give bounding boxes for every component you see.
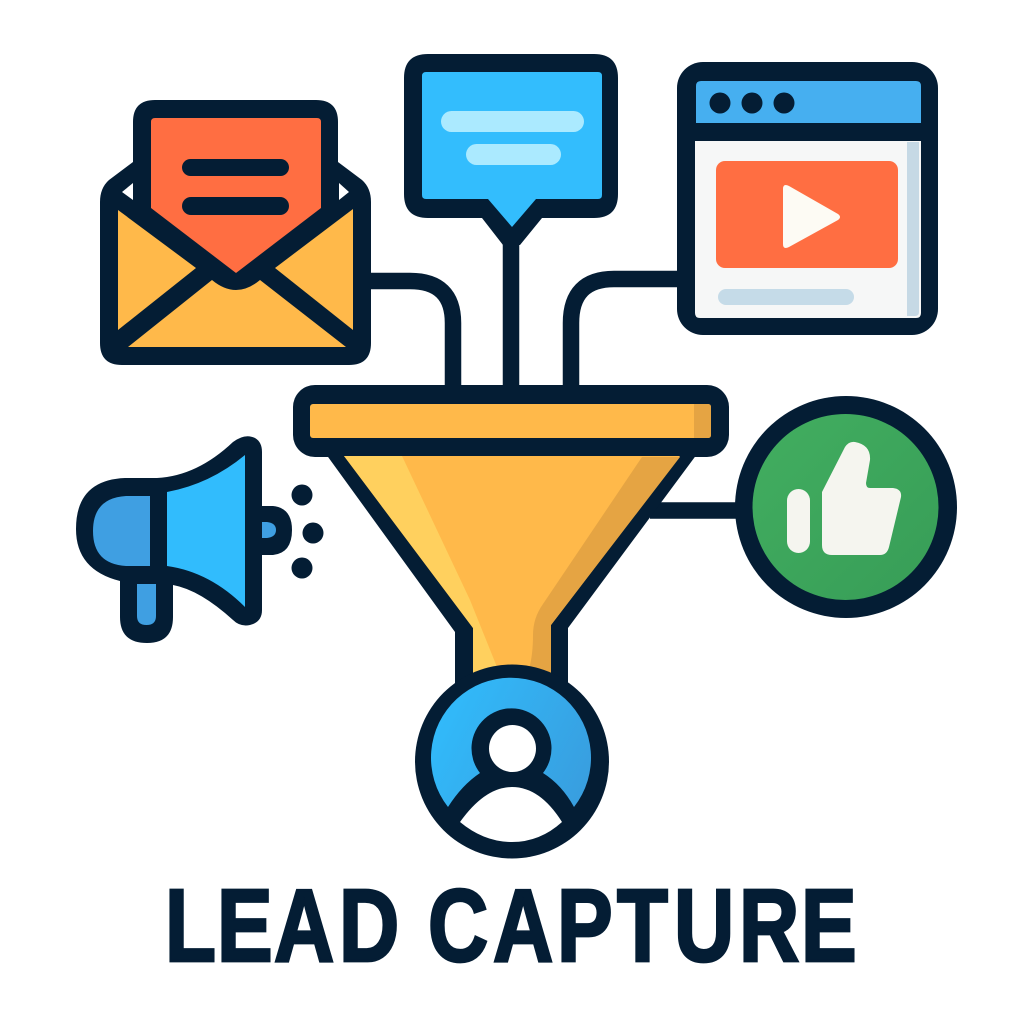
icon: user avatar	[415, 664, 609, 858]
icon: megaphone	[76, 436, 324, 643]
icon: thumbs up badge	[735, 396, 957, 618]
icon: funnel	[293, 385, 729, 695]
icon: video browser window	[677, 62, 938, 335]
title: LEAD CAPTURE	[165, 868, 857, 983]
icon: envelope with letter	[100, 100, 371, 365]
icon: speech bubble	[404, 54, 618, 245]
connector lines	[360, 225, 745, 510]
